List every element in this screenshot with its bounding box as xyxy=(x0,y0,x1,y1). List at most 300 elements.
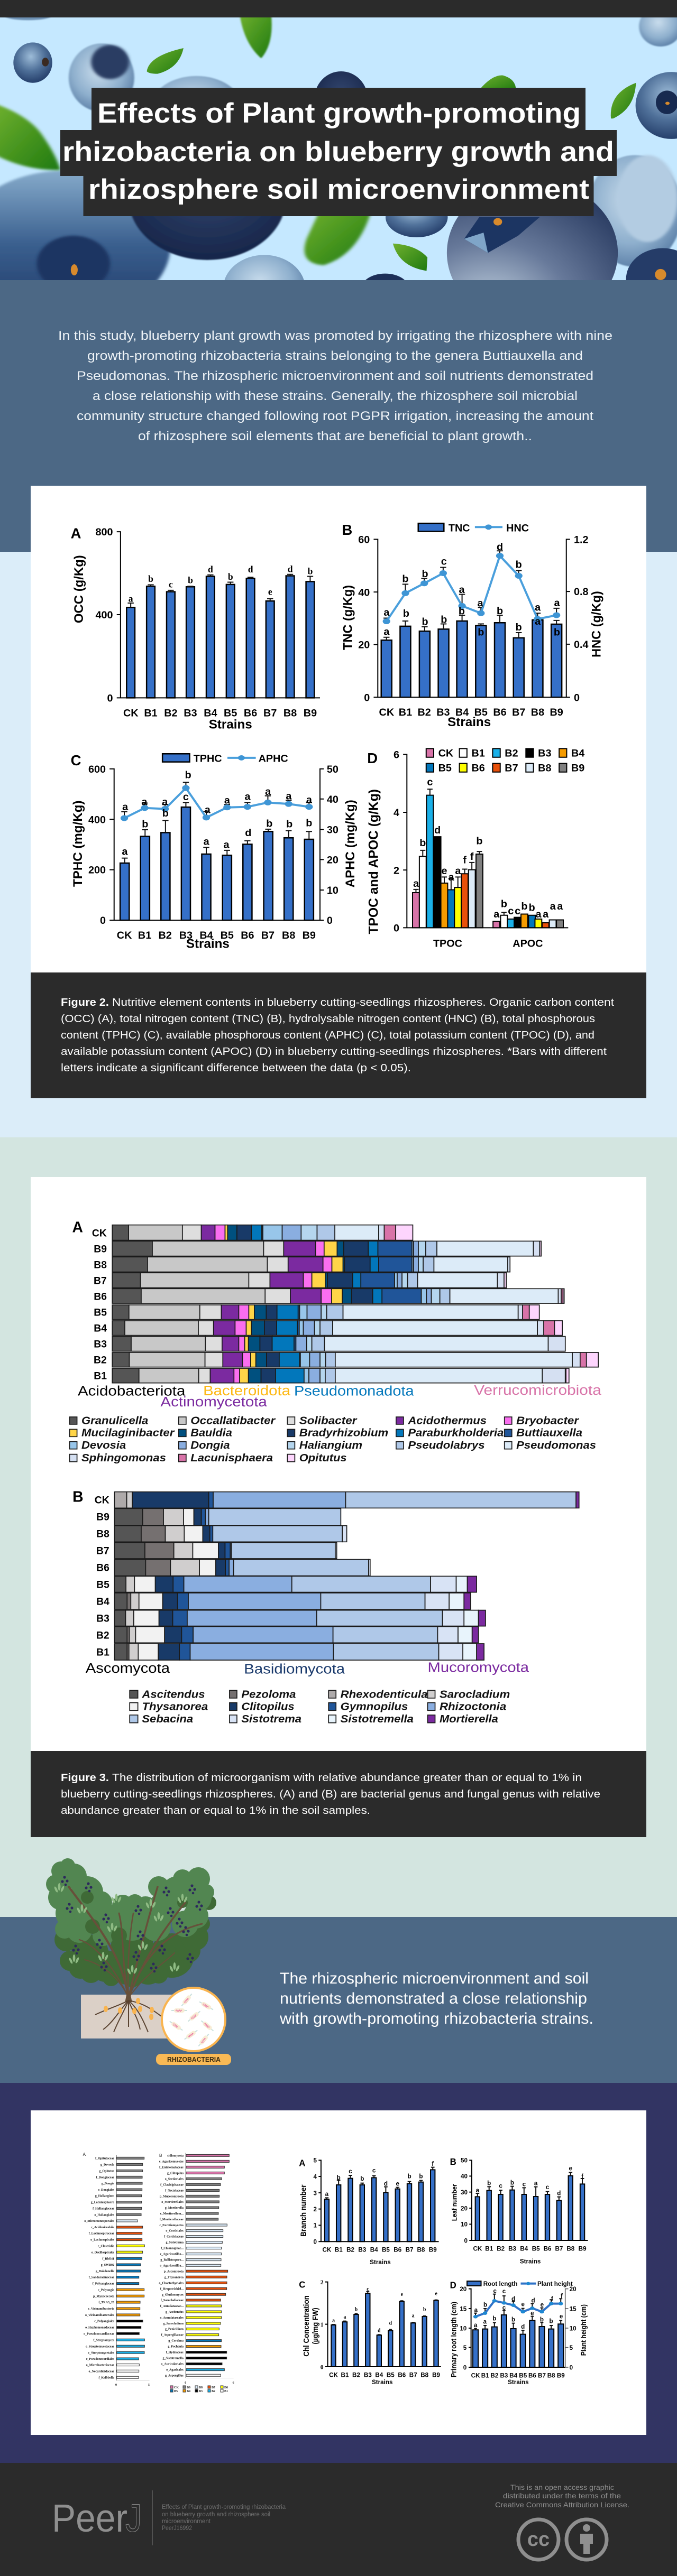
chart D: TPOC and APOC: B9 xyxy=(571,763,584,774)
statement text xyxy=(279,1970,593,2027)
intro paragraph: growth-promoting rhizobacteria strains belonging to the genera Buttiauxella and xyxy=(87,349,583,363)
stacked bar chart A: bacterial genera: B2 xyxy=(94,1355,107,1366)
taxa chart A labels: o_Pseudonocardiaceae xyxy=(84,2332,114,2336)
chart A: OCC: a xyxy=(129,593,133,604)
title: rhizobacteria on blueberry growth and xyxy=(62,136,614,168)
chart D: root length and plant height: B4 xyxy=(509,2371,518,2379)
taxa chart B labels: f_Aspergillaceae xyxy=(161,2334,184,2337)
chart B: TNC and HNC: a xyxy=(383,626,390,637)
stacked bar chart A: bacterial genera: B9 xyxy=(94,1244,107,1255)
chart D: TPOC and APOC: B8 xyxy=(538,763,551,774)
chart B: TNC and HNC: TNC (g/Kg) xyxy=(342,585,355,650)
taxa chart A labels: f_Haliangiaceae xyxy=(93,2207,114,2210)
taxa chart axis ticks and legend: B5 xyxy=(174,2390,178,2393)
taxa chart B labels: g_Ascitendus xyxy=(166,2311,184,2314)
chart D: root length and plant height: f xyxy=(561,2292,563,2300)
chart A: branch number xyxy=(299,2157,439,2266)
taxa chart A labels: o_Micromonosporales xyxy=(84,2220,115,2223)
chart C: TPHC and APHC: a xyxy=(265,786,271,798)
panel: figure 3 charts xyxy=(31,1177,646,1751)
taxa chart axis ticks and legend: B4 xyxy=(187,2390,190,2393)
taxa chart A labels: o_Nocardioidaceae xyxy=(88,2370,114,2373)
intro paragraph xyxy=(58,329,612,443)
taxa chart axis ticks and legend: B2 xyxy=(212,2390,215,2393)
chart A: OCC: B1 xyxy=(144,707,158,719)
chart D: root length and plant height: B7 xyxy=(538,2371,546,2379)
chart C: chlorophyll concentration: B9 xyxy=(432,2371,440,2378)
chart D: root length and plant height: B5 xyxy=(519,2371,527,2379)
stacked bar chart A: bacterial genera: Dongia xyxy=(190,1439,230,1451)
chart A: branch number: 5 xyxy=(314,2157,317,2164)
stacked bar chart B: fungal genera: Mortierella xyxy=(440,1713,498,1725)
chart D: TPOC and APOC: B5 xyxy=(438,763,452,774)
chart B: leaf number: 40 xyxy=(461,2173,468,2180)
taxa chart A labels: f_Blrii41 xyxy=(102,2257,114,2260)
chart B: TNC and HNC: 20 xyxy=(358,640,370,651)
chart D: TPOC and APOC: B3 xyxy=(538,748,551,759)
chart B: TNC and HNC: b xyxy=(422,568,428,580)
title: Effects of Plant growth-promoting xyxy=(97,98,581,129)
taxa chart B labels: sidiomycota xyxy=(167,2154,184,2157)
chart D: root length and plant height: c xyxy=(493,2287,497,2294)
stacked bar chart B: fungal genera: CK xyxy=(95,1495,109,1506)
caption: figure 2: available potassium content (APOC) (D) in blueberry cutting-seedlings rhizospheres. *Bars with different xyxy=(61,1046,607,1058)
chart C: chlorophyll concentration: 1 xyxy=(321,2321,324,2328)
callout: rhizobacteria magnifier xyxy=(162,1988,225,2051)
stacked bar chart A: bacterial genera: Buttiauxella xyxy=(516,1426,582,1439)
chart A: branch number: B7 xyxy=(406,2246,414,2254)
stacked bar chart B: fungal genera: B3 xyxy=(96,1613,109,1624)
chart A: OCC: B4 xyxy=(204,707,217,719)
taxa chart axis ticks and legend: B9 xyxy=(187,2386,190,2389)
chart D: root length and plant height: B9 xyxy=(557,2371,565,2379)
chart C: TPHC and APHC: a xyxy=(286,790,292,802)
chart A: branch number: f xyxy=(432,2160,434,2167)
chart C: TPHC and APHC: B1 xyxy=(138,930,151,941)
chart B: leaf number: B3 xyxy=(508,2245,516,2252)
chart D: root length and plant height xyxy=(450,2280,588,2386)
taxa chart B labels: o_Chaetothyriales xyxy=(159,2282,184,2285)
chart B: TNC and HNC: b xyxy=(554,626,560,638)
stacked bar chart A: bacterial genera: Solibacter xyxy=(299,1414,358,1426)
chart B: TNC and HNC: b xyxy=(403,608,409,619)
chart D: root length and plant height: c xyxy=(502,2287,506,2295)
taxa chart A labels: c_Pseudonocardiales xyxy=(86,2358,115,2361)
chart A: OCC: B9 xyxy=(304,707,317,719)
stacked bar chart A: bacterial genera: B8 xyxy=(94,1260,107,1271)
chart B: leaf number xyxy=(450,2157,588,2265)
taxa chart B labels: f_Corticiaceae xyxy=(164,2236,184,2239)
chart B: TNC and HNC: Strains xyxy=(447,715,491,729)
stacked bar chart A: bacterial genera: B1 xyxy=(94,1371,107,1382)
chart C: chlorophyll concentration: c xyxy=(367,2286,369,2292)
footer: PeerJ logo: J xyxy=(125,2496,142,2540)
chart C: TPHC and APHC: B9 xyxy=(303,930,316,941)
label: rhizobacteria xyxy=(156,2054,231,2065)
chart B: TNC and HNC: a xyxy=(383,607,390,618)
taxa chart A labels: c_Acidimicrobiia xyxy=(91,2226,114,2229)
taxa bar chart: LDA scores xyxy=(83,2152,234,2385)
chart B: leaf number: B5 xyxy=(532,2245,540,2252)
taxa chart B labels: f_Herpotrichiel... xyxy=(160,2287,184,2291)
chart C: chlorophyll concentration: B4 xyxy=(375,2371,383,2378)
chart D: TPOC and APOC: 6 xyxy=(394,749,399,761)
caption: figure 3: Figure 3. xyxy=(61,1772,109,1784)
chart B: leaf number: a xyxy=(476,2186,480,2194)
taxa chart B labels: g_Glutinomyces xyxy=(162,2293,184,2296)
taxa chart B labels: o_Annulatascales xyxy=(160,2316,184,2320)
taxa chart B labels: g_Sarocladium xyxy=(163,2322,184,2325)
stacked bar chart A: bacterial genera: Pseudomonadota xyxy=(294,1384,414,1399)
chart C: TPHC and APHC: a xyxy=(224,839,230,850)
stacked bar chart A: bacterial genera: Pseudomonas xyxy=(516,1439,596,1451)
chart A: branch number: B6 xyxy=(394,2246,402,2254)
chart A: branch number: b xyxy=(360,2175,364,2182)
chart B: leaf number: B4 xyxy=(520,2245,528,2252)
chart A: OCC: b xyxy=(228,571,233,582)
taxa chart B labels: c_Agaricomycetes xyxy=(159,2160,184,2163)
chart C: TPHC and APHC: a xyxy=(142,796,148,808)
chart D: root length and plant height: Strains xyxy=(508,2378,529,2386)
stacked bar chart A: bacterial genera: Occallatibacter xyxy=(190,1414,276,1426)
taxa chart B labels: f_Sarocladiaceae xyxy=(161,2299,184,2302)
chart C: chlorophyll concentration: CK xyxy=(329,2371,338,2378)
chart A: branch number: B9 xyxy=(429,2246,437,2254)
chart D: TPOC and APOC: a xyxy=(455,865,461,877)
taxa chart A labels: o_Oscillospirales xyxy=(92,2251,115,2254)
chart B: TNC and HNC: b xyxy=(459,605,465,617)
chart B: leaf number: c xyxy=(546,2183,550,2191)
chart C: chlorophyll concentration: e xyxy=(435,2291,437,2296)
chart B: TNC and HNC: b xyxy=(402,573,408,585)
chart B: TNC and HNC: 1.2 xyxy=(574,534,589,545)
chart D: TPOC and APOC: a xyxy=(493,909,500,920)
statement text: nutrients demonstrated a close relationship xyxy=(280,1990,587,2007)
chart C: TPHC and APHC: a xyxy=(205,804,211,816)
chart D: root length and plant height: b xyxy=(511,2315,515,2323)
chart D: TPOC and APOC: c xyxy=(515,905,520,917)
chart C: TPHC and APHC: 200 xyxy=(88,865,106,876)
chart C: chlorophyll concentration: B7 xyxy=(409,2371,417,2378)
chart D: root length and plant height: a xyxy=(474,2306,478,2313)
taxa chart A labels: p_Myxococcota xyxy=(93,2295,114,2298)
chart D: root length and plant height: a xyxy=(474,2321,478,2329)
chart A: OCC: 0 xyxy=(107,693,113,704)
chart D: root length and plant height: b xyxy=(492,2314,496,2322)
stacked bar chart A: bacterial genera: B5 xyxy=(94,1308,107,1319)
stacked bar chart B: fungal genera: Mucoromycota xyxy=(428,1660,529,1675)
chart D: root length and plant height: e xyxy=(541,2301,544,2309)
chart D: root length and plant height: c xyxy=(502,2304,506,2311)
chart A: OCC: 800 xyxy=(96,526,113,538)
taxa chart B labels: g_Ballistospero... xyxy=(160,2259,184,2262)
stacked bar chart A: bacterial genera: Haliangium xyxy=(299,1439,362,1451)
taxa chart A labels: f_Polyangiaceae xyxy=(93,2283,114,2286)
footer: license text: distributed under the terms of the xyxy=(503,2491,621,2500)
taxa chart B labels: f_Annulatascac... xyxy=(160,2305,184,2308)
chart A: branch number: B1 xyxy=(335,2246,343,2254)
stacked bar chart B: fungal genera: B2 xyxy=(96,1630,109,1641)
chart C: TPHC and APHC: Strains xyxy=(186,937,230,951)
chart D: root length and plant height: Plant height (cm) xyxy=(579,2304,588,2356)
chart D: root length and plant height: b xyxy=(550,2317,553,2325)
stacked bar chart A: bacterial genera: Bacteroidota xyxy=(203,1383,290,1398)
chart B: leaf number: B7 xyxy=(555,2245,563,2252)
stacked bar chart A: bacterial genera: Opitutus xyxy=(299,1452,347,1463)
chart A: OCC: CK xyxy=(123,707,139,719)
stacked bar chart A: bacterial genera: Devosia xyxy=(81,1439,126,1451)
taxa chart B labels xyxy=(159,2154,184,2377)
chart C: TPHC and APHC: 50 xyxy=(327,764,338,775)
taxa chart B labels: c_Mortierellom... xyxy=(160,2212,184,2216)
chart A: OCC: e xyxy=(268,587,272,597)
chart D: root length and plant height: B6 xyxy=(528,2371,536,2379)
chart D: root length and plant height: Plant height xyxy=(537,2280,573,2287)
figure 2 chart group xyxy=(71,522,604,951)
stacked bar chart B: fungal genera: B4 xyxy=(96,1596,109,1607)
chart B: TNC and HNC: b xyxy=(497,605,503,617)
chart D: TPOC and APOC: D xyxy=(367,750,378,766)
taxa chart axis ticks and legend: B3 xyxy=(199,2390,203,2393)
chart A: OCC: B5 xyxy=(224,707,237,719)
taxa chart A labels: o_Dongiales xyxy=(98,2189,115,2192)
chart C: chlorophyll concentration: a xyxy=(344,2314,346,2320)
chart B: TNC and HNC: a xyxy=(535,601,541,613)
stacked bar chart A: bacterial genera: CK xyxy=(92,1228,107,1239)
taxa chart A labels: o_Lachnospirales xyxy=(90,2239,115,2242)
chart C: TPHC and APHC: b xyxy=(142,819,148,830)
chart C: TPHC and APHC: 20 xyxy=(327,855,338,866)
stacked bar chart A: bacterial genera: Acidobacteriota xyxy=(78,1384,186,1399)
figure 4 growth chart group xyxy=(299,2157,588,2386)
intro paragraph: community structure changed following root PGPR irrigation, increasing the amount xyxy=(77,409,593,423)
chart D: TPOC and APOC: 2 xyxy=(394,865,399,876)
chart C: chlorophyll concentration: B6 xyxy=(398,2371,406,2378)
chart D: root length and plant height: B1 xyxy=(481,2371,489,2379)
taxa chart B labels: o_Sordariales xyxy=(165,2177,184,2181)
caption: figure 3 xyxy=(31,1751,646,1837)
chart D: TPOC and APOC: e xyxy=(442,865,447,877)
chart D: TPOC and APOC: TPOC xyxy=(433,938,462,950)
chart D: root length and plant height: b xyxy=(540,2315,544,2323)
chart C: TPHC and APHC: B5 xyxy=(221,930,234,941)
chart B: leaf number: b xyxy=(487,2180,491,2187)
chart B: TNC and HNC: b xyxy=(516,622,522,633)
taxa chart A labels: f_Opitutaceae xyxy=(95,2157,114,2160)
chart D: root length and plant height: d xyxy=(531,2296,535,2304)
label: rhizobacteria: RHIZOBACTERIA xyxy=(167,2055,221,2063)
chart B: leaf number: 50 xyxy=(461,2157,468,2164)
chart D: TPOC and APOC: c xyxy=(427,776,433,788)
section background: footer xyxy=(0,2463,677,2576)
stacked bar chart A: bacterial genera: Pseudolabrys xyxy=(408,1439,485,1451)
taxa chart B labels: f_Mortierellaceae xyxy=(160,2218,184,2221)
taxa chart A labels: c_Polyangiales xyxy=(94,2320,115,2323)
chart A: OCC: b xyxy=(308,566,313,577)
chart C: TPHC and APHC: d xyxy=(245,827,251,839)
chart A: branch number: B4 xyxy=(370,2246,378,2254)
taxa chart A labels: g_Lacunisphaera xyxy=(91,2201,114,2204)
chart C: TPHC and APHC: b xyxy=(286,819,292,830)
taxa chart axis ticks and legend: B7 xyxy=(212,2386,215,2389)
stacked bar chart B: fungal genera: Sarocladium xyxy=(440,1688,510,1700)
chart A: OCC: B2 xyxy=(164,707,178,719)
chart D: root length and plant height: 5 xyxy=(463,2344,467,2351)
chart C: TPHC and APHC: a xyxy=(306,794,313,805)
chart C: chlorophyll concentration: C xyxy=(299,2280,305,2290)
section background: figure 4 xyxy=(0,2083,677,2463)
chart D: TPOC and APOC: a xyxy=(413,878,419,889)
chart D: root length and plant height: e xyxy=(530,2309,534,2317)
chart C: TPHC and APHC: b xyxy=(266,818,272,829)
taxa chart A labels: c_Vicinamibacteria xyxy=(88,2308,114,2311)
stacked bar chart B: fungal genera: Basidiomycota xyxy=(244,1662,345,1677)
chart B: leaf number: 10 xyxy=(461,2220,468,2228)
chart B: leaf number: B2 xyxy=(497,2245,505,2252)
title xyxy=(60,88,617,216)
chart D: TPOC and APOC: CK xyxy=(438,748,454,759)
taxa chart A labels: o_Vicinamibacterales xyxy=(85,2314,115,2317)
chart A: branch number: B8 xyxy=(417,2246,425,2254)
chart A: OCC: b xyxy=(188,575,193,586)
taxa chart B labels: g_Aspergillus xyxy=(165,2374,184,2377)
chart C: chlorophyll concentration: b xyxy=(423,2306,426,2312)
chart C: chlorophyll concentration: e xyxy=(401,2292,404,2297)
taxa chart B labels: f_Entolomataceae xyxy=(159,2166,184,2169)
chart A: branch number: A xyxy=(299,2158,305,2168)
title: rhizosphere soil microenvironment xyxy=(88,174,589,205)
chart C: chlorophyll concentration: 0 xyxy=(321,2363,324,2370)
taxa chart B labels: c_Eurotiomycetes xyxy=(160,2224,184,2227)
taxa chart B labels: g_Sistotrema xyxy=(166,2241,184,2245)
chart D: TPOC and APOC xyxy=(367,748,584,950)
chart B: TNC and HNC: B5 xyxy=(474,707,488,718)
chart C: chlorophyll concentration: a xyxy=(332,2318,335,2323)
chart D: TPOC and APOC: b xyxy=(501,898,507,910)
chart A: OCC: 400 xyxy=(96,609,113,621)
chart D: TPOC and APOC: B1 xyxy=(471,748,485,759)
chart D: root length and plant height: 15 xyxy=(570,2305,577,2312)
caption: figure 2: Figure 2. xyxy=(61,997,109,1008)
chart B: TNC and HNC: B2 xyxy=(417,707,431,718)
chart A: OCC: Strains xyxy=(209,718,252,731)
taxa chart B labels: g_Sistotremella xyxy=(163,2357,184,2360)
stacked bar chart A: bacterial genera: A xyxy=(72,1219,83,1236)
chart A: OCC: b xyxy=(148,573,153,584)
taxa chart A labels: g_Dokdonella xyxy=(96,2270,114,2273)
chart B: TNC and HNC: B8 xyxy=(531,707,544,718)
chart D: root length and plant height: d xyxy=(521,2323,525,2330)
chart B: leaf number: CK xyxy=(473,2245,482,2252)
chart C: TPHC and APHC: CK xyxy=(117,930,132,941)
footer: license text xyxy=(495,2483,629,2509)
chart D: root length and plant height: 20 xyxy=(460,2285,467,2293)
chart C: chlorophyll concentration: B5 xyxy=(387,2371,395,2378)
taxa chart A labels: 6 xyxy=(233,2382,234,2385)
caption: figure 2: letters indicate a significant difference between the data (p < 0.05). xyxy=(61,1062,411,1074)
chart C: chlorophyll concentration: d xyxy=(389,2321,392,2327)
chart A: branch number: 0 xyxy=(314,2238,317,2246)
section background: figure 2 xyxy=(0,552,677,1137)
chart A: OCC: c xyxy=(169,579,173,589)
taxa chart A labels: f_Kribbella xyxy=(98,2376,114,2379)
chart B: leaf number: b xyxy=(510,2179,514,2186)
taxa chart A labels: o_Streptomycetaceae xyxy=(86,2345,114,2348)
taxa chart B labels: g_Mortierella xyxy=(165,2207,184,2210)
taxa chart B labels: o_Corticiales xyxy=(166,2230,184,2233)
chart B: leaf number: B6 xyxy=(544,2245,552,2252)
chart A: OCC: B8 xyxy=(283,707,297,719)
chart A: OCC: OCC (g/Kg) xyxy=(72,555,86,623)
chart B: TNC and HNC: B xyxy=(342,522,352,538)
stacked bar chart B: fungal genera: B7 xyxy=(96,1545,109,1556)
footer: license text: This is an open access graphic xyxy=(510,2483,614,2491)
stacked bar chart A: bacterial genera: B6 xyxy=(94,1291,107,1302)
chart D: TPOC and APOC: B6 xyxy=(471,763,485,774)
chart C: TPHC and APHC: 0 xyxy=(327,915,333,926)
chart A: branch number: 4 xyxy=(314,2173,317,2180)
stacked bar chart A: bacterial genera: Bradyrhizobium xyxy=(299,1426,388,1439)
chart A: OCC: A xyxy=(71,525,81,542)
chart B: TNC and HNC: 60 xyxy=(358,534,370,545)
caption: figure 2: content (TPHC) (C), available phosphorous content (APHC) (C), total potassium content (TPOC) (D), and xyxy=(61,1030,594,1041)
stacked bar chart A: bacterial genera: Bauldia xyxy=(190,1426,232,1439)
chart C: TPHC and APHC: B3 xyxy=(179,930,193,941)
chart B: TNC and HNC: B4 xyxy=(455,707,469,718)
chart B: TNC and HNC: b xyxy=(422,616,428,628)
chart B: TNC and HNC: a xyxy=(459,584,465,596)
chart B: leaf number: B8 xyxy=(566,2245,575,2252)
taxa bar chart: LDA scores: A xyxy=(83,2152,86,2157)
stacked bar chart A: bacterial genera: Granulicella xyxy=(81,1414,148,1426)
taxa chart B labels: p_Mucoromycota xyxy=(160,2195,184,2198)
chart C: TPHC and APHC: APHC xyxy=(259,753,288,765)
chart C: TPHC and APHC: B7 xyxy=(261,930,275,941)
taxa chart A labels: c_Polyangia xyxy=(98,2288,114,2292)
chart A: OCC xyxy=(71,525,320,731)
stacked bar chart B: fungal genera: B1 xyxy=(96,1647,109,1658)
taxa chart A labels: f_Streptomyces xyxy=(94,2339,115,2342)
taxa chart A labels: g_SWB02 xyxy=(101,2264,114,2267)
stacked bar chart A: bacterial genera: Acidothermus xyxy=(408,1414,487,1426)
footer: citation text: Effects of Plant growth-promoting rhizobacteria xyxy=(162,2504,286,2510)
chart B: TNC and HNC: 0.8 xyxy=(574,586,589,598)
taxa chart B labels: f_Nectriaceae xyxy=(165,2189,184,2192)
taxa chart A labels: c_Clostridia xyxy=(98,2245,114,2248)
caption: figure 3: The distribution of microorganism with relative abundance greater than or equal to 1% in xyxy=(112,1772,582,1784)
chart A: branch number: 1 xyxy=(314,2221,317,2229)
chart B: leaf number: 0 xyxy=(464,2237,468,2244)
taxa chart A labels: o_Haliangiales xyxy=(94,2213,115,2217)
taxa chart B labels: o_Mortierellales xyxy=(161,2201,184,2204)
taxa chart axis ticks and legend: B6 xyxy=(224,2386,228,2389)
chart C: chlorophyll concentration: B1 xyxy=(341,2371,349,2378)
footer: citation text: microenvironment xyxy=(162,2518,211,2525)
taxa chart B labels: g_Penicillium xyxy=(165,2328,184,2331)
taxa chart axis ticks and legend: 5 xyxy=(148,2384,150,2387)
footer: license text: Creative Commons Attribution License. xyxy=(495,2500,629,2509)
soil block xyxy=(81,1995,173,2038)
chart D: TPOC and APOC: b xyxy=(529,902,535,914)
taxa chart A labels: f_TRA3_20 xyxy=(98,2301,114,2304)
chart B: TNC and HNC: b xyxy=(441,614,447,625)
caption: figure 2 xyxy=(31,972,646,1098)
taxa bar chart: LDA scores: B xyxy=(159,2153,162,2158)
chart C: TPHC and APHC xyxy=(71,752,358,951)
chart D: root length and plant height: 10 xyxy=(570,2324,577,2332)
intro paragraph: of rhizosphere soil elements that are beneficial to plant growth.. xyxy=(138,429,532,443)
chart B: TNC and HNC: d xyxy=(497,541,503,553)
